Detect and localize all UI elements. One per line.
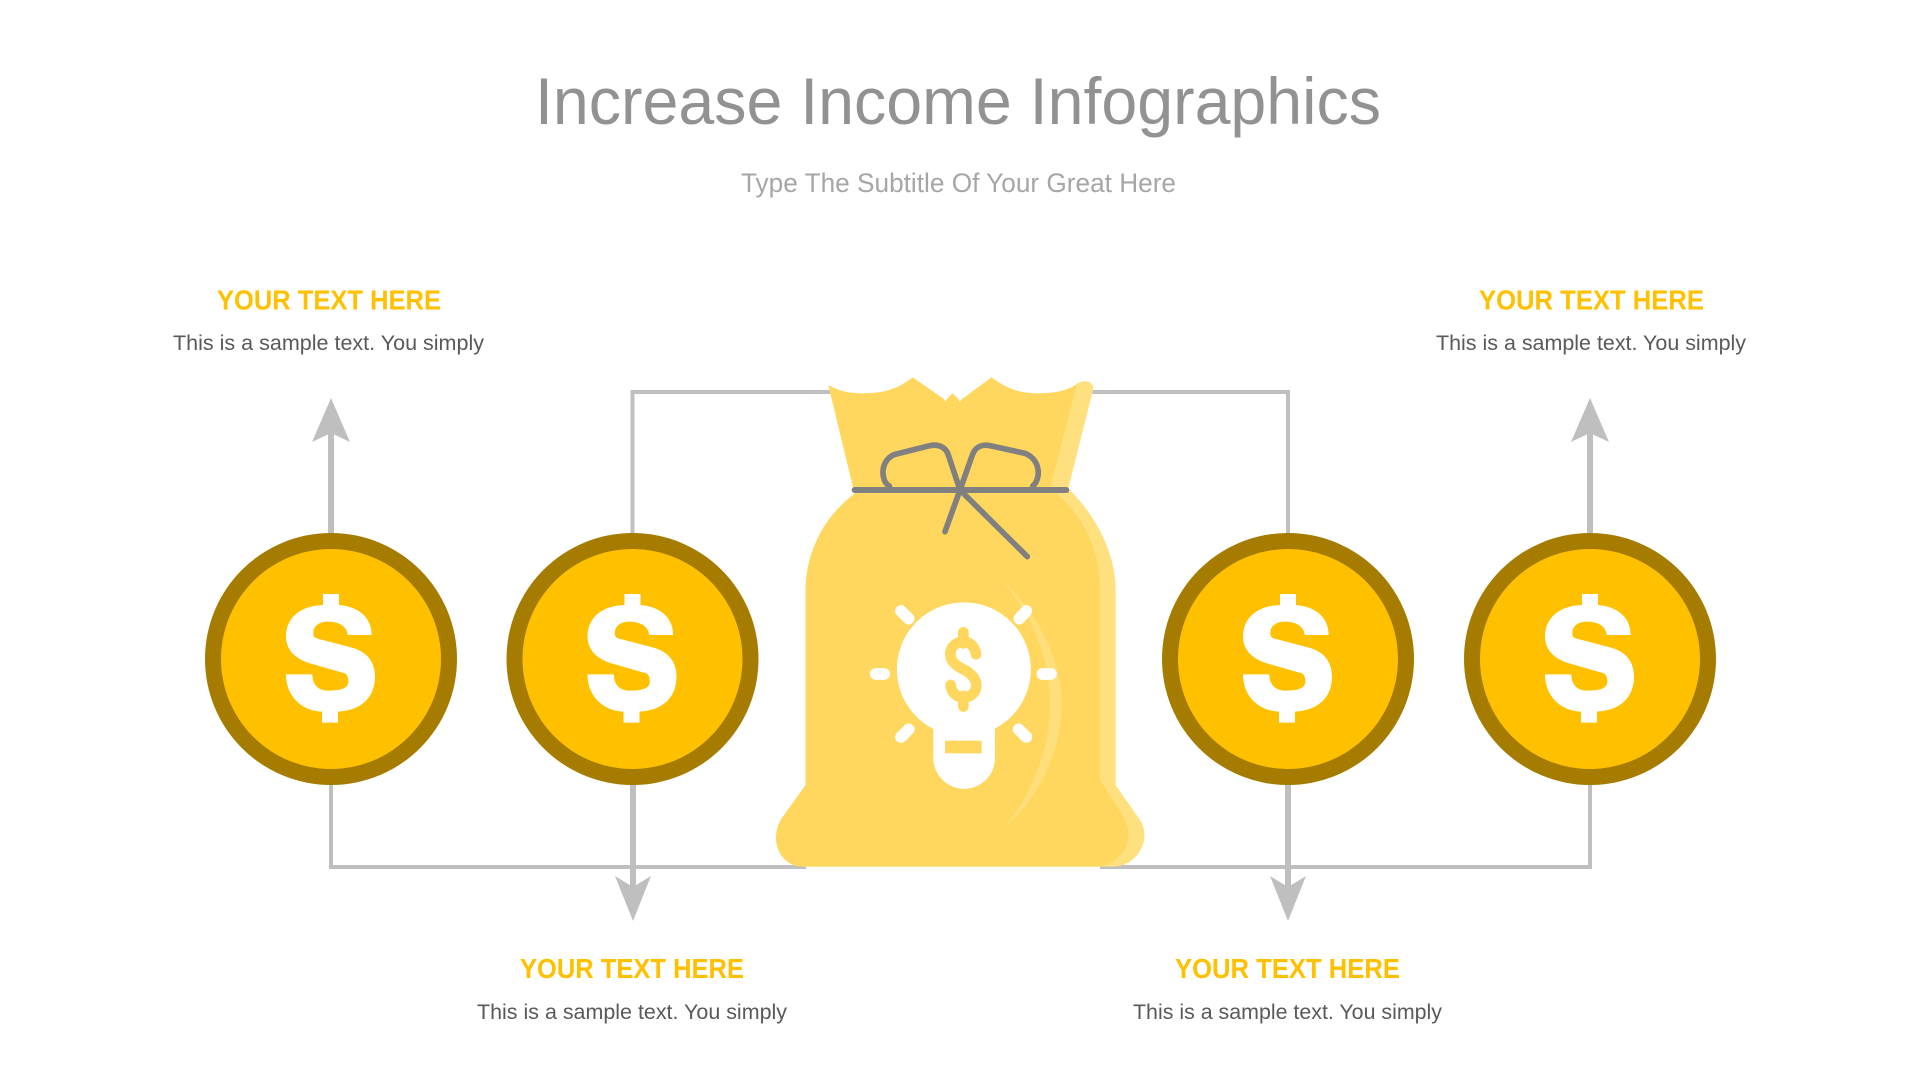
connector: top right [1085, 392, 1288, 535]
label: top right: This is a sample text. You simply [1436, 332, 1747, 355]
label: top right [1436, 284, 1747, 355]
label: bottom left [477, 953, 788, 1024]
bow string [855, 445, 1066, 557]
label: bottom right [1133, 953, 1443, 1024]
connector: bottom left [331, 780, 806, 867]
coin 1 [205, 533, 457, 785]
connector: bottom right [1100, 780, 1590, 867]
arrow: down left [615, 780, 651, 921]
label: bottom right: This is a sample text. You simply [1133, 1001, 1443, 1024]
arrow: up right [1571, 398, 1609, 540]
title: Increase Income Infographics [535, 64, 1381, 138]
money bag [776, 377, 1144, 867]
bag body [776, 377, 1128, 867]
connector: top left [632, 392, 835, 535]
label: bottom left: This is a sample text. You simply [477, 1001, 788, 1024]
subtitle: Type The Subtitle Of Your Great Here [741, 168, 1176, 198]
arrow: down right [1270, 780, 1306, 921]
bag highlight [776, 377, 1144, 867]
coin 2 [506, 533, 758, 785]
label: bottom right: YOUR TEXT HERE [1175, 953, 1400, 984]
coin 4 [1464, 533, 1716, 785]
label: top left [173, 284, 485, 355]
arrow: up left [312, 398, 350, 540]
label: top left: YOUR TEXT HERE [217, 284, 441, 316]
label: top right: YOUR TEXT HERE [1479, 284, 1704, 316]
icon: light bulb with dollar [876, 602, 1051, 789]
label: top left: This is a sample text. You simply [173, 332, 485, 355]
label: bottom left: YOUR TEXT HERE [520, 953, 744, 984]
coin 3 [1162, 533, 1414, 785]
crescent shine [1002, 580, 1062, 827]
